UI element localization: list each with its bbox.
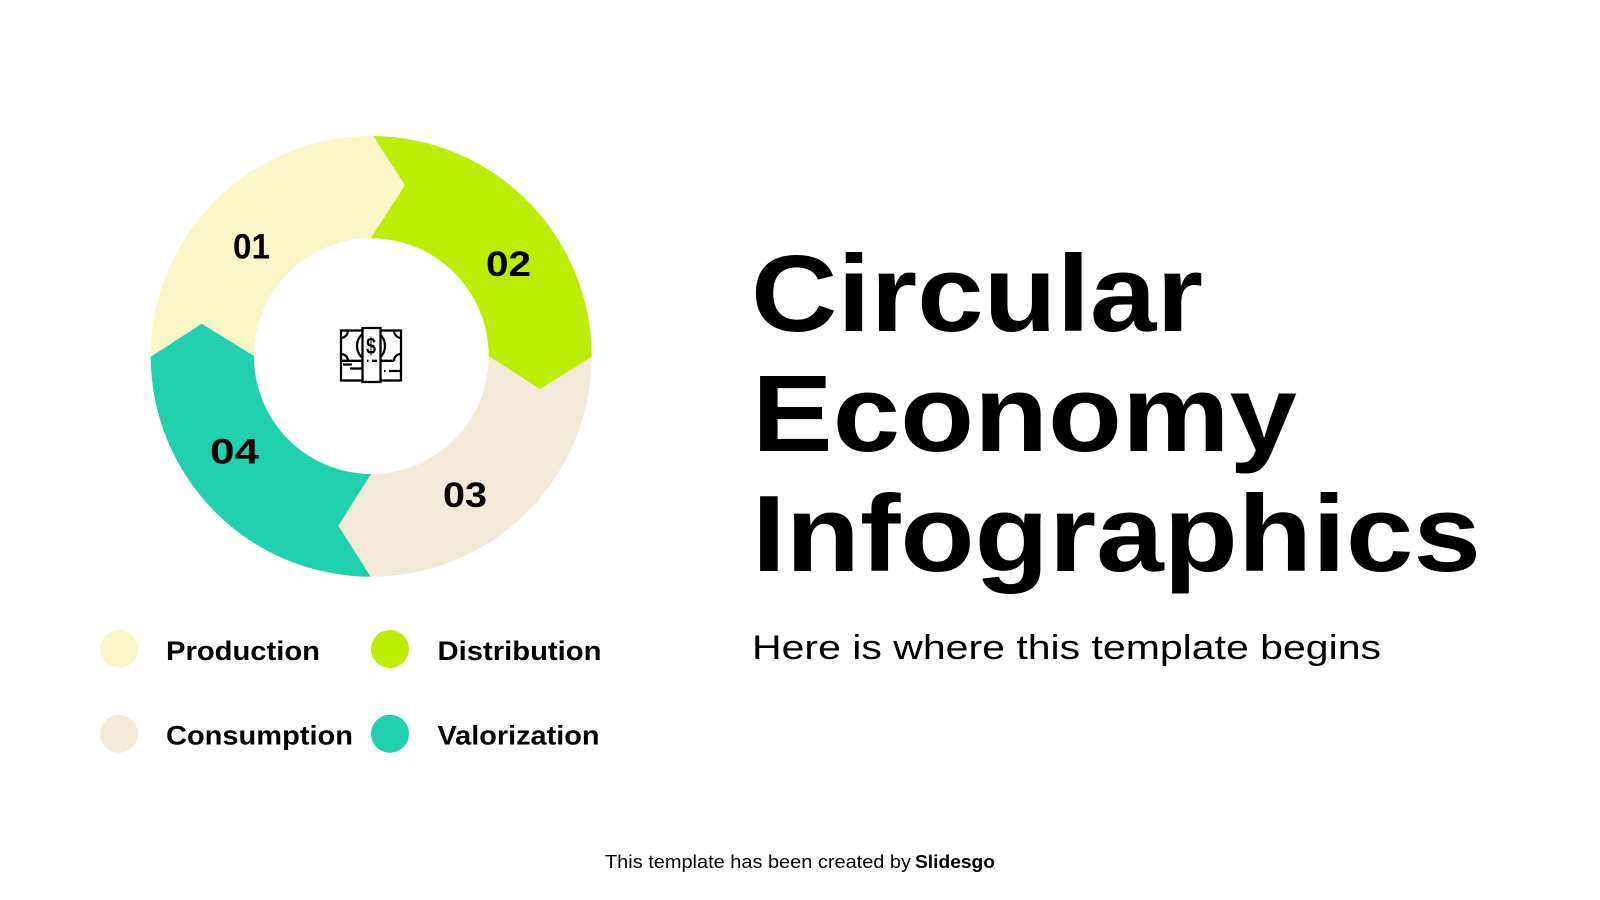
title: Infographics xyxy=(752,473,1481,595)
subtitle: Here is where this template begins xyxy=(752,629,1381,667)
legend item: valorization xyxy=(371,715,600,753)
number 03: 03 xyxy=(443,476,487,515)
legend item: distribution: Distribution xyxy=(438,636,602,666)
title: Circular xyxy=(751,233,1203,355)
legend item: distribution xyxy=(371,630,602,668)
legend xyxy=(100,630,602,753)
footer credit: This template has been created by xyxy=(605,851,912,872)
number 04: 04 xyxy=(210,432,260,472)
legend item: consumption xyxy=(100,715,353,753)
number 02: 02 xyxy=(486,245,531,284)
title xyxy=(751,233,1481,595)
segment 03: consumption xyxy=(338,356,592,577)
title: Economy xyxy=(752,353,1297,475)
circular arrow diagram xyxy=(151,136,592,577)
footer credit: Slidesgo xyxy=(915,851,995,872)
segment 01: production xyxy=(151,136,405,357)
legend item: production xyxy=(100,630,320,668)
number 01: 01 xyxy=(233,228,270,266)
icon: banknote stack: $ xyxy=(366,333,376,359)
legend item: valorization: Valorization xyxy=(438,720,600,750)
segment 02: distribution xyxy=(371,136,592,389)
segment 04: valorization xyxy=(151,324,371,577)
legend item: production: Production xyxy=(166,636,320,666)
legend item: consumption: Consumption xyxy=(166,720,353,750)
icon: banknote stack xyxy=(341,328,401,382)
